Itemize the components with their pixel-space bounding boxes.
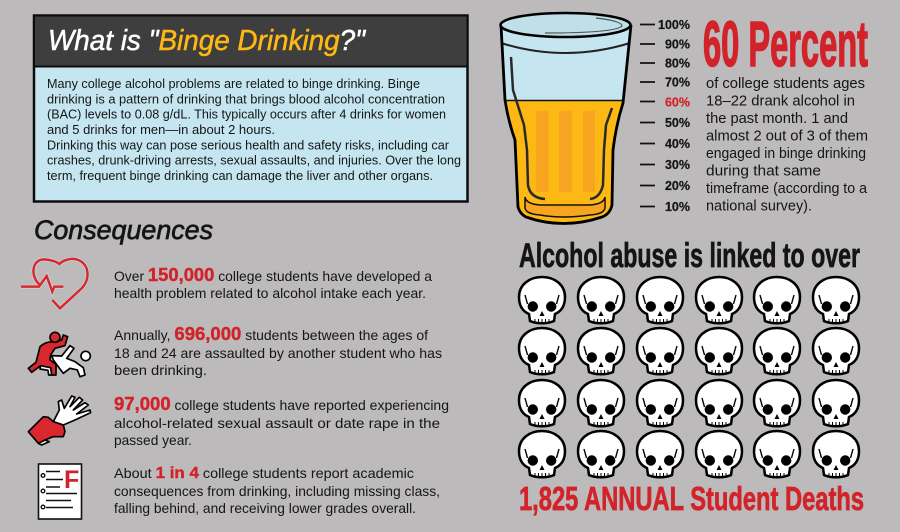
text: health consequence: Over 150,000 college students have developed a	[114, 265, 432, 285]
body text: (BAC) levels to 0.08 g/dL. This typically occurs after 4 drinks for women	[47, 108, 446, 122]
icon: beer glass	[500, 13, 631, 224]
chart scale: percent marks: 100%	[658, 18, 690, 32]
text: sexual assault consequence	[114, 394, 449, 448]
panel background	[34, 16, 468, 202]
text: survey statistic: engaged in binge drinking	[706, 146, 866, 162]
text: assault consequence: 18 and 24 are assaulted by another student who has	[114, 346, 442, 361]
text: survey statistic	[706, 76, 868, 214]
text: assault consequence: Annually, 696,000 students between the ages of	[114, 324, 428, 344]
icon: failing grade paper	[38, 464, 82, 519]
heading: What is "Binge Drinking?"	[48, 25, 367, 57]
text: health consequence	[114, 265, 432, 301]
text: survey statistic: almost 2 out of 3 of them	[706, 128, 868, 144]
chart scale: percent marks: 40%	[665, 137, 690, 151]
body text: crashes, drunk-driving arrests, sexual assaults, and injuries. Over the long	[47, 154, 461, 168]
text: survey statistic: national survey).	[706, 198, 812, 214]
icon: heart with pulse	[21, 259, 88, 308]
body text	[47, 77, 461, 183]
heading: consequences: Consequences	[34, 215, 213, 245]
chart scale: percent marks: 90%	[665, 38, 690, 52]
body text: drinking is a pattern of drinking that brings blood alcohol concentration	[47, 92, 445, 106]
body text: Many college alcohol problems are related to binge drinking. Binge	[47, 77, 420, 91]
chart scale: percent marks: 30%	[665, 158, 690, 172]
text: assault consequence	[114, 324, 442, 378]
panel: what is binge drinking	[34, 16, 468, 202]
body text: term, frequent binge drinking can damage the liver and other organs.	[47, 169, 433, 183]
header band	[34, 16, 468, 66]
text: sexual assault consequence: alcohol-related sexual assault or date rape in the	[114, 416, 440, 431]
text: health consequence: health problem related to alcohol intake each year.	[114, 286, 426, 301]
icon: failing grade paper: F	[64, 466, 79, 494]
icon: assault figures	[28, 332, 90, 377]
icon grid: skulls	[519, 277, 859, 477]
text: sexual assault consequence: 97,000 college students have reported experiencing	[114, 394, 449, 414]
chart scale: percent marks	[640, 18, 690, 214]
chart scale: percent marks: 80%	[665, 56, 690, 70]
icon: grabbed hand	[28, 396, 91, 445]
text: survey statistic: of college students ages	[706, 76, 865, 92]
text: academic consequence: consequences from drinking, including missing class,	[114, 484, 440, 499]
chart scale: percent marks: 20%	[665, 179, 690, 193]
text: survey statistic: timeframe (according to a	[706, 181, 867, 197]
chart scale: percent marks: 10%	[665, 200, 690, 214]
text: academic consequence: About 1 in 4 college students report academic	[114, 465, 414, 482]
text: survey statistic: the past month. 1 and	[706, 111, 848, 127]
text: assault consequence: been drinking.	[114, 363, 207, 378]
text: academic consequence	[114, 465, 440, 516]
text: academic consequence: falling behind, and receiving lower grades overall.	[114, 501, 416, 516]
chart scale: percent marks: 70%	[665, 76, 690, 90]
text: survey statistic: 18–22 drank alcohol in	[706, 94, 855, 110]
text: sexual assault consequence: passed year.	[114, 433, 192, 448]
text: survey statistic: during that same	[706, 164, 821, 180]
body text: and 5 drinks for men—in about 2 hours.	[47, 123, 275, 137]
chart scale: percent marks: 50%	[665, 116, 690, 130]
body text: Drinking this way can pose serious health and safety risks, including car	[47, 138, 450, 152]
chart scale: percent marks: 60%	[665, 96, 690, 110]
